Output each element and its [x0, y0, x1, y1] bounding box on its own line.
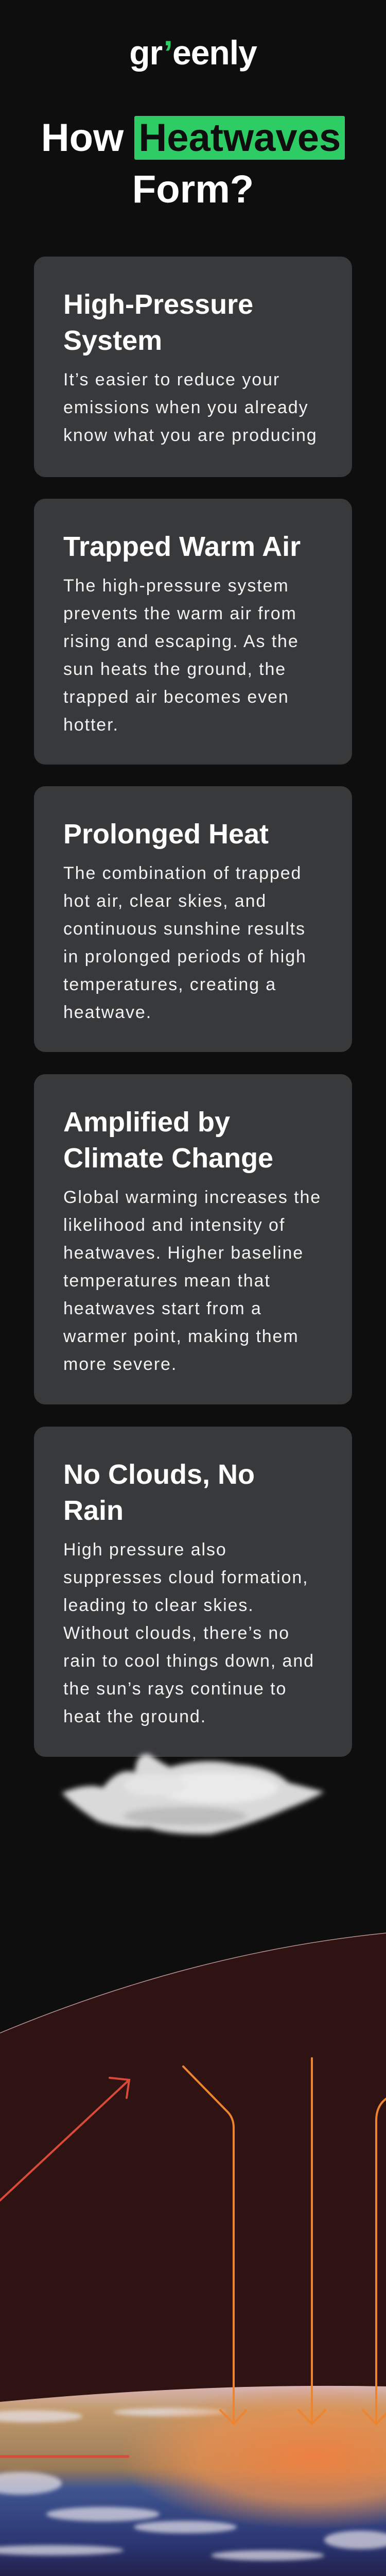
card text: rising and escaping. As the — [63, 632, 299, 651]
card text: continuous sunshine results — [63, 919, 306, 939]
card text: hotter. — [63, 715, 119, 735]
card title: Trapped Warm Air — [63, 531, 301, 562]
card text: temperatures, creating a — [63, 975, 276, 994]
card title — [63, 1107, 273, 1174]
card text: warmer point, making them — [63, 1327, 299, 1346]
arrows: sun rays (orange) — [183, 2058, 386, 2424]
panel: high-pressure system — [34, 257, 352, 477]
card text: High pressure also — [63, 1540, 227, 1560]
card title: Climate Change — [63, 1143, 273, 1174]
card text — [63, 370, 318, 445]
card text: heatwaves. Higher baseline — [63, 1243, 304, 1263]
card title: Amplified by — [63, 1107, 230, 1138]
card title: System — [63, 325, 162, 356]
card text: temperatures mean that — [63, 1271, 271, 1291]
card title — [63, 1459, 255, 1526]
card text: hot air, clear skies, and — [63, 891, 267, 911]
card text: likelihood and intensity of — [63, 1215, 285, 1235]
card text: sun heats the ground, the — [63, 659, 286, 679]
card text: trapped air becomes even — [63, 687, 289, 707]
card text: heatwave. — [63, 1003, 152, 1022]
panel: no clouds no rain — [34, 1427, 352, 1757]
panel: trapped warm air — [34, 499, 352, 765]
card text: rain to cool things down, and — [63, 1651, 314, 1671]
card text: It’s easier to reduce your — [63, 370, 280, 389]
logo: gr’eenly — [129, 33, 257, 72]
card text — [63, 576, 299, 735]
card text: heat the ground. — [63, 1707, 206, 1726]
card text: heatwaves start from a — [63, 1299, 262, 1318]
card text: Global warming increases the — [63, 1188, 321, 1207]
panel: amplified by climate change — [34, 1074, 352, 1404]
illustration: atmosphere and earth — [0, 1751, 386, 2576]
card text: more severe. — [63, 1354, 177, 1374]
earth — [0, 2385, 386, 2576]
title: How Heatwaves — [41, 116, 341, 160]
card text: The combination of trapped — [63, 863, 302, 883]
card text — [63, 1540, 314, 1726]
card text: emissions when you already — [63, 398, 309, 417]
card text — [63, 1188, 321, 1374]
card text: The high-pressure system — [63, 576, 289, 596]
card title: High-Pressure — [63, 289, 253, 320]
card text: suppresses cloud formation, — [63, 1568, 309, 1587]
card text: leading to clear skies. — [63, 1596, 254, 1615]
card title: Prolonged Heat — [63, 819, 269, 850]
card text: Without clouds, there’s no — [63, 1623, 290, 1643]
card text: in prolonged periods of high — [63, 947, 307, 967]
card title: Rain — [63, 1495, 124, 1526]
red horizontal line — [0, 2455, 129, 2458]
card text — [63, 863, 307, 1022]
card title — [63, 289, 253, 356]
panel: prolonged heat — [34, 786, 352, 1052]
title — [41, 116, 345, 211]
arrow: rising warm air (red) — [0, 2078, 129, 2200]
card text: know what you are producing — [63, 426, 318, 445]
card text: prevents the warm air from — [63, 604, 297, 623]
cloud — [62, 1754, 324, 1834]
card title: No Clouds, No — [63, 1459, 255, 1490]
card text: the sun’s rays continue to — [63, 1679, 287, 1699]
title: Form? — [132, 167, 254, 211]
atmosphere — [0, 1933, 386, 2576]
